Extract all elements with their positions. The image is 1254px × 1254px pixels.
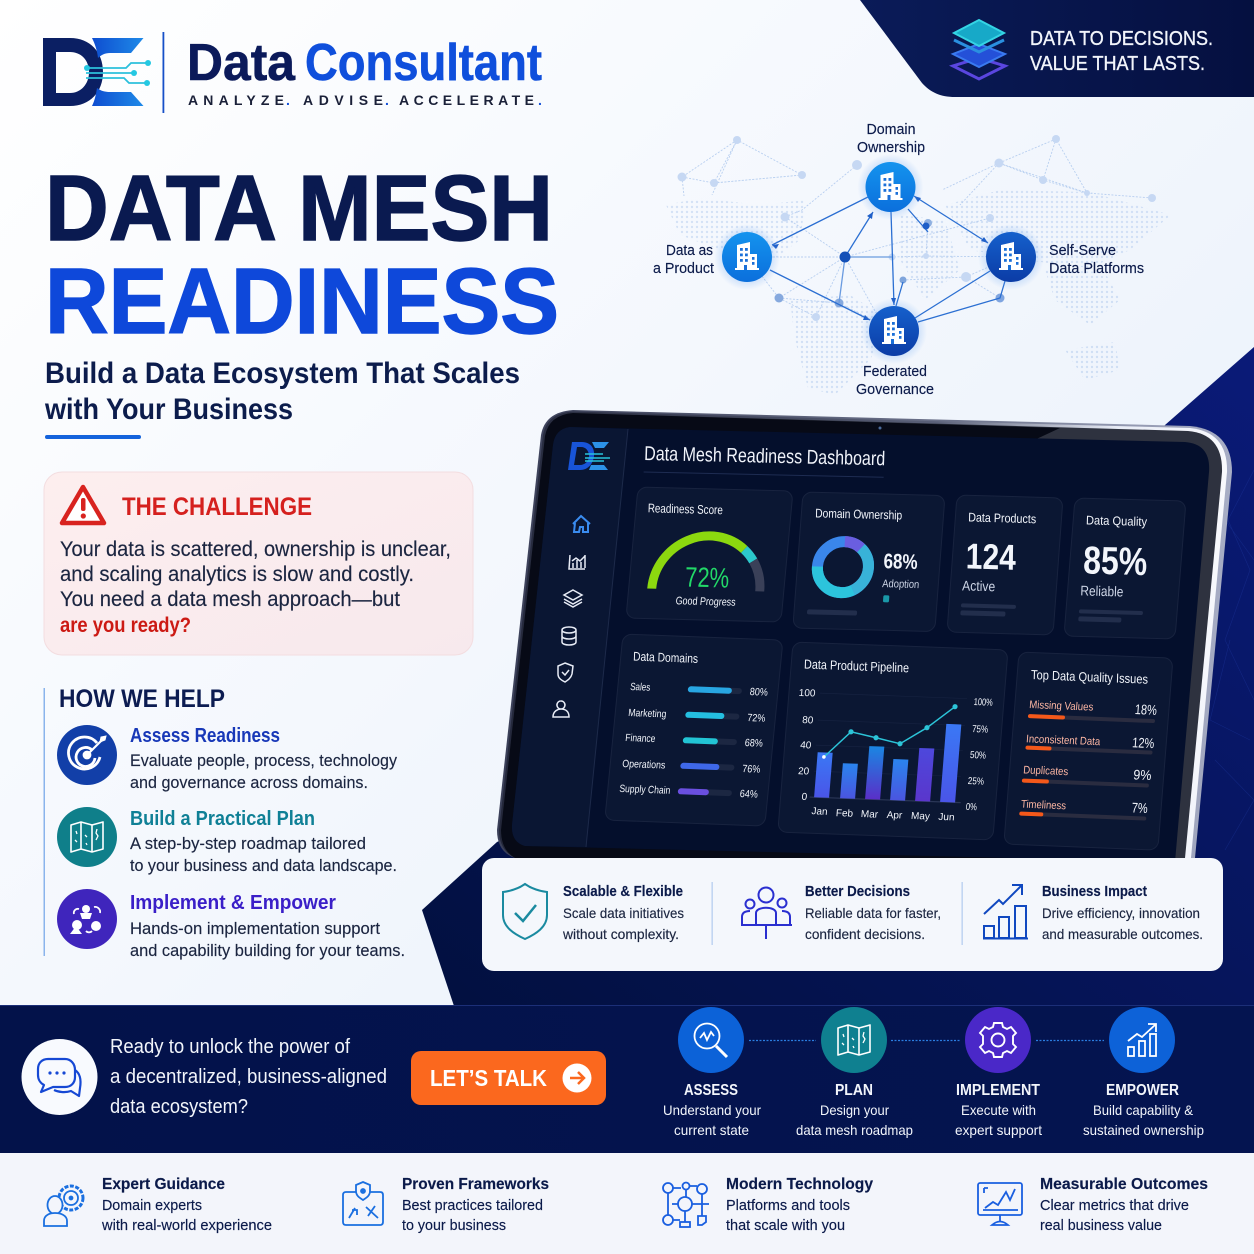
card: data product pipeline chart: 50% — [970, 750, 986, 762]
card: data product pipeline chart: Apr — [886, 810, 903, 822]
feature: measurable outcomes: real business value — [1040, 1218, 1162, 1234]
call to action band — [0, 1005, 1254, 1153]
brand tagline — [188, 92, 542, 108]
brand tagline: . — [538, 92, 542, 108]
footer strip — [0, 1153, 1254, 1254]
card: data product pipeline chart: Feb — [835, 808, 854, 820]
brand tagline: . — [385, 92, 389, 108]
item: assess readiness: Assess Readiness — [130, 725, 280, 747]
benefit: better decisions: Better Decisions — [805, 883, 910, 900]
step: plan — [796, 1007, 913, 1138]
feature: measurable outcomes — [978, 1176, 1208, 1234]
challenge text: and scaling analytics is slow and costly. — [60, 563, 414, 586]
dark angled backdrop behind tablet — [422, 347, 1254, 1006]
item: build a practical plan — [57, 807, 397, 875]
connectors — [749, 1040, 1104, 1042]
step: implement: IMPLEMENT — [956, 1082, 1040, 1099]
button: let's talk — [411, 1051, 606, 1105]
icon: shield — [558, 663, 573, 682]
node: data as a product — [653, 224, 780, 290]
card: data domains: Data Domains — [633, 649, 698, 666]
feature: modern technology — [663, 1176, 873, 1234]
icon: home — [573, 516, 590, 532]
call to action text: a decentralized, business-aligned — [110, 1066, 387, 1088]
icon: chart — [569, 555, 585, 569]
card: data product pipeline chart: 80 — [802, 715, 814, 726]
feature: measurable outcomes: Clear metrics that drive — [1040, 1198, 1189, 1214]
step: empower: EMPOWER — [1106, 1082, 1179, 1099]
subtitle: Build a Data Ecosystem That Scales — [45, 357, 520, 390]
challenge text: You need a data mesh approach—but — [60, 588, 400, 611]
world map dots — [666, 190, 1171, 395]
card: readiness score: 72% — [685, 561, 730, 594]
node: data as a product: Data as — [666, 242, 713, 259]
brand tagline: . — [286, 92, 290, 108]
item: implement and empower — [57, 889, 405, 960]
logo mark — [43, 38, 151, 106]
faint mesh lines — [682, 139, 1152, 331]
feature: proven frameworks — [343, 1176, 549, 1234]
card: top data quality issues: Missing Values — [1029, 699, 1094, 714]
connecting arrows — [770, 196, 1005, 322]
brand tagline: ADVISE — [303, 92, 383, 108]
card: data products: 124 — [966, 535, 1016, 578]
sidebar icons — [553, 516, 590, 717]
brand tagline: ACCELERATE — [399, 92, 534, 108]
benefit: scalable and flexible: Scalable & Flexible — [563, 883, 683, 900]
card: data product pipeline chart: 0% — [965, 802, 977, 813]
benefit: business impact: and measurable outcomes. — [1042, 926, 1203, 942]
benefit: better decisions: Reliable data for faster, — [805, 905, 941, 921]
card: data domains: Supply Chain — [619, 783, 671, 797]
item: implement and empower: Hands-on implementation support — [130, 919, 380, 938]
card: data product pipeline chart: 100% — [973, 697, 993, 709]
tagline — [1030, 28, 1213, 75]
node: domain ownership — [857, 121, 925, 220]
card: top data quality issues: 7% — [1131, 799, 1148, 816]
feature: expert guidance: with real-world experience — [101, 1218, 272, 1234]
card: top data quality issues: 12% — [1132, 734, 1155, 751]
feature: modern technology: Platforms and tools — [726, 1198, 850, 1214]
node: domain ownership: Domain — [866, 121, 916, 138]
item: assess readiness: and governance across domains. — [130, 773, 368, 792]
card: top data quality issues — [1004, 652, 1173, 850]
card: data domains: 68% — [744, 737, 763, 750]
card: data product pipeline chart: Jan — [811, 806, 828, 818]
subtitle: with Your Business — [44, 393, 293, 426]
card: data domains: 80% — [749, 686, 768, 699]
card: data product pipeline chart: 75% — [972, 724, 989, 736]
card: data products: Active — [962, 577, 996, 594]
card: data domains — [605, 634, 783, 826]
feature: modern technology: Modern Technology — [726, 1176, 873, 1193]
node: domain ownership: Ownership — [857, 139, 925, 156]
card: top data quality issues: Timeliness — [1021, 799, 1067, 812]
step: implement — [955, 1007, 1042, 1138]
donut chart — [816, 541, 870, 593]
panel: benefits — [482, 858, 1223, 971]
card: data product pipeline chart: 20 — [798, 766, 810, 777]
benefit: business impact: Business Impact — [1042, 883, 1147, 900]
card: data domains: Sales — [630, 681, 651, 694]
step: implement: Execute with — [961, 1102, 1036, 1118]
card: data product pipeline chart: May — [911, 811, 930, 823]
step: implement: expert support — [955, 1122, 1042, 1138]
panel: the challenge — [44, 472, 473, 655]
subtitle — [44, 357, 520, 439]
icon: warning triangle — [62, 487, 104, 523]
benefit: business impact: Drive efficiency, innovation — [1042, 905, 1200, 921]
logo — [43, 32, 542, 113]
node: data as a product: a Product — [653, 260, 715, 277]
challenge text: Your data is scattered, ownership is unclear, — [60, 538, 451, 561]
challenge text: are you ready? — [60, 614, 191, 637]
item: build a practical plan: A step-by-step roadmap tailored — [130, 834, 366, 853]
card: data quality: Data Quality — [1086, 513, 1148, 529]
node: self-serve data platforms — [978, 224, 1144, 290]
feature: proven frameworks: to your business — [402, 1218, 506, 1234]
card: domain ownership — [793, 492, 945, 632]
step: plan: Design your — [820, 1102, 889, 1118]
brand name — [187, 34, 542, 92]
dashboard title: Data Mesh Readiness Dashboard — [644, 443, 886, 470]
card: data product pipeline chart: Mar — [860, 809, 879, 821]
step: empower: Build capability & — [1093, 1102, 1194, 1118]
icon: user — [553, 701, 569, 717]
card: top data quality issues: 9% — [1133, 766, 1152, 783]
call to action text — [110, 1036, 387, 1118]
card: data product pipeline chart: Jun — [938, 812, 955, 823]
card: data quality: Reliable — [1080, 582, 1124, 600]
card: domain ownership: Domain Ownership — [815, 506, 902, 523]
network diagram — [653, 121, 1171, 398]
feature: expert guidance — [44, 1176, 272, 1234]
item: build a practical plan: to your business and data landscape. — [130, 856, 397, 875]
step: plan: data mesh roadmap — [796, 1122, 913, 1138]
card: readiness score: Good Progress — [675, 595, 737, 609]
card: data domains: Operations — [622, 758, 666, 772]
node: federated governance: Federated — [863, 363, 927, 380]
icon: database — [562, 627, 576, 645]
item: implement and empower: and capability building for your teams. — [130, 941, 405, 960]
card: data quality — [1064, 498, 1186, 639]
gauge — [652, 535, 765, 591]
panel: how we help — [44, 685, 405, 960]
challenge text — [60, 538, 451, 637]
item: assess readiness — [57, 725, 397, 792]
card: data domains: 72% — [747, 712, 766, 725]
item: assess readiness: Evaluate people, process, technology — [130, 751, 397, 770]
brand name: Consultant — [305, 34, 542, 92]
feature: measurable outcomes: Measurable Outcomes — [1040, 1176, 1208, 1193]
feature: proven frameworks: Best practices tailored — [402, 1198, 543, 1214]
card: data domains: Marketing — [628, 707, 667, 720]
sidebar logo — [568, 442, 610, 470]
dashboard title — [644, 443, 886, 477]
benefit: scalable and flexible: Scale data initiatives — [563, 905, 684, 921]
tagline: VALUE THAT LASTS. — [1030, 53, 1205, 75]
card: data domains: Finance — [625, 732, 656, 745]
feature: modern technology: that scale with you — [726, 1218, 845, 1234]
heading: HOW WE HELP — [59, 685, 225, 713]
step: assess: ASSESS — [684, 1082, 738, 1099]
challenge heading: THE CHALLENGE — [122, 493, 312, 521]
step: assess: current state — [674, 1122, 749, 1138]
card: data quality: 85% — [1083, 539, 1148, 584]
brand name: Data — [187, 34, 296, 92]
card: data products: Data Products — [968, 510, 1036, 526]
title — [45, 156, 559, 353]
title: READINESS — [45, 249, 559, 353]
node: federated governance — [856, 298, 934, 398]
step: empower — [1083, 1007, 1204, 1138]
icon: chat bubbles — [22, 1039, 98, 1115]
brand tagline: ANALYZE — [188, 92, 284, 108]
icon: layers — [564, 590, 582, 607]
card: top data quality issues: Inconsistent Data — [1026, 733, 1101, 748]
step: assess: Understand your — [663, 1102, 761, 1118]
benefit: business impact — [983, 883, 1203, 942]
card: domain ownership: 68% — [883, 550, 918, 574]
call to action text: Ready to unlock the power of — [110, 1036, 350, 1058]
card: top data quality issues: 18% — [1134, 701, 1158, 718]
feature: proven frameworks: Proven Frameworks — [402, 1176, 549, 1193]
card: data products — [947, 495, 1063, 635]
card: data product pipeline chart: 0 — [801, 792, 808, 803]
item: implement and empower: Implement & Empower — [130, 892, 336, 914]
card: data product pipeline chart — [778, 642, 1008, 840]
tablet dashboard — [497, 410, 1232, 862]
card: data product pipeline chart: Data Product Pipeline — [804, 656, 909, 675]
tagline: DATA TO DECISIONS. — [1030, 28, 1213, 50]
benefit: scalable and flexible: without complexity. — [562, 926, 679, 942]
call to action text: data ecosystem? — [110, 1096, 248, 1118]
benefit: scalable and flexible — [503, 883, 684, 942]
button: let's talk: LET’S TALK — [430, 1065, 547, 1091]
node: self-serve data platforms: Self-Serve — [1049, 242, 1116, 259]
card: top data quality issues: Duplicates — [1023, 764, 1069, 778]
card: readiness score: Readiness Score — [648, 501, 723, 517]
tablet frame — [497, 410, 1232, 862]
card: data domains: 64% — [739, 788, 758, 801]
card: domain ownership: Adoption — [882, 578, 920, 591]
title: DATA MESH — [45, 156, 553, 260]
card: data product pipeline chart: 25% — [967, 776, 984, 788]
icon: stacked layers — [953, 20, 1005, 79]
card: data product pipeline chart: 100 — [798, 688, 816, 699]
feature: expert guidance: Domain experts — [102, 1198, 202, 1214]
card: data product pipeline chart: 40 — [800, 740, 812, 751]
top-right banner — [860, 0, 1254, 97]
card: top data quality issues: Top Data Quality Issues — [1031, 667, 1149, 687]
card: data domains: 76% — [742, 763, 761, 776]
benefit: better decisions: confident decisions. — [805, 926, 925, 942]
card: readiness score — [626, 487, 793, 622]
step: plan: PLAN — [835, 1082, 873, 1099]
node: self-serve data platforms: Data Platforms — [1049, 260, 1144, 277]
node: federated governance: Governance — [856, 381, 934, 398]
feature: expert guidance: Expert Guidance — [102, 1176, 225, 1193]
benefit: better decisions — [741, 883, 941, 942]
item: build a practical plan: Build a Practical Plan — [130, 808, 315, 830]
step: assess — [663, 1007, 761, 1138]
step: empower: sustained ownership — [1083, 1122, 1204, 1138]
